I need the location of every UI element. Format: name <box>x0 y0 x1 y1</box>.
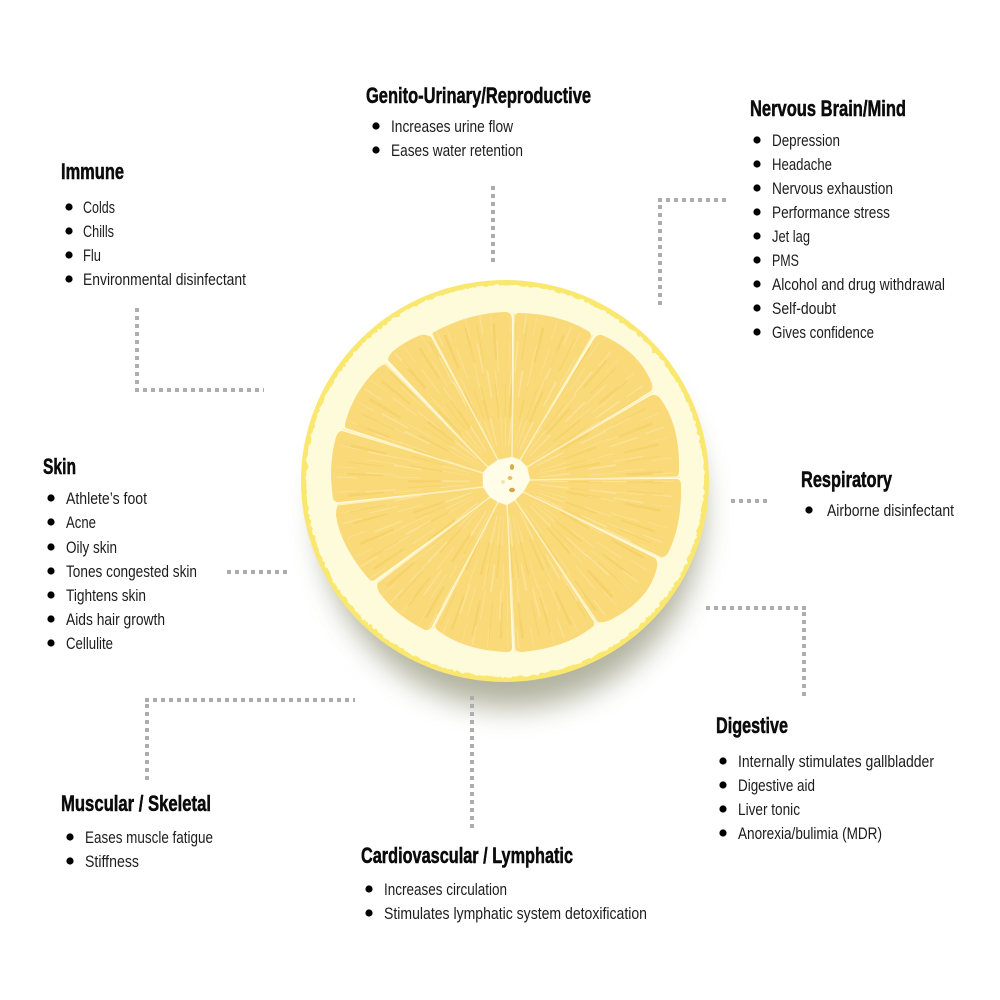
lemon slice <box>301 280 709 708</box>
panel: nervous <box>750 96 945 342</box>
panel: respiratory <box>801 467 954 520</box>
list: respiratory: Airborne disinfectant <box>827 501 954 520</box>
connector: digestive <box>706 608 806 698</box>
list: skin <box>47 489 197 653</box>
list: cardiovascular: Stimulates lymphatic system detoxification <box>384 904 647 923</box>
connector: muscular skeletal <box>145 700 355 781</box>
list: nervous: Self-doubt <box>772 299 836 318</box>
heading: respiratory: Respiratory <box>801 467 893 492</box>
list: skin: Aids hair growth <box>66 610 165 629</box>
list: digestive: Liver tonic <box>738 800 800 819</box>
list: immune: Colds <box>83 198 115 217</box>
list: digestive: Anorexia/bulimia (MDR) <box>738 824 882 843</box>
lemon pith <box>306 285 704 677</box>
list: digestive <box>719 752 934 843</box>
panel: immune <box>61 159 246 289</box>
list: nervous: Headache <box>772 155 832 174</box>
list: nervous: Gives confidence <box>772 323 874 342</box>
panel: cardiovascular <box>361 843 647 923</box>
list: nervous: PMS <box>772 251 799 270</box>
list: digestive: Internally stimulates gallbladder <box>738 752 934 771</box>
connector: genito-urinary <box>491 186 495 262</box>
list: nervous: Depression <box>772 131 840 150</box>
panel: muscular skeletal <box>61 791 213 871</box>
heading: immune: Immune <box>61 159 124 184</box>
list: skin: Athlete’s foot <box>66 489 147 508</box>
list: skin: Tightens skin <box>66 586 146 605</box>
heading: nervous: Nervous Brain/Mind <box>750 96 906 121</box>
panel: genito-urinary <box>366 83 591 160</box>
list: cardiovascular <box>365 880 647 923</box>
list: nervous <box>753 131 945 342</box>
list: nervous: Performance stress <box>772 203 890 222</box>
list: skin: Oily skin <box>66 538 117 557</box>
heading: muscular skeletal: Muscular / Skeletal <box>61 791 211 816</box>
list: genito-urinary: Eases water retention <box>391 141 523 160</box>
list: nervous: Alcohol and drug withdrawal <box>772 275 945 294</box>
list: immune: Environmental disinfectant <box>83 270 246 289</box>
heading: skin: Skin <box>43 454 76 479</box>
segment membranes <box>337 313 680 652</box>
lemon core <box>483 457 530 505</box>
list: skin: Acne <box>66 513 96 532</box>
list: nervous: Jet lag <box>772 227 810 246</box>
panel: digestive <box>716 713 934 843</box>
heading: digestive: Digestive <box>716 713 788 738</box>
list: skin: Cellulite <box>66 634 113 653</box>
heading: cardiovascular: Cardiovascular / Lymphatic <box>361 843 573 868</box>
lemon segments <box>331 312 682 652</box>
list: muscular skeletal: Stiffness <box>85 852 139 871</box>
connector: nervous <box>658 200 730 305</box>
lemon drop shadow <box>319 316 703 708</box>
list: genito-urinary: Increases urine flow <box>391 117 514 136</box>
panel: skin <box>43 454 197 653</box>
list: digestive: Digestive aid <box>738 776 815 795</box>
list: immune <box>65 198 246 289</box>
list: cardiovascular: Increases circulation <box>384 880 507 899</box>
connector: skin <box>227 570 287 574</box>
lemon rind <box>301 280 709 682</box>
list: immune: Chills <box>83 222 114 241</box>
list: skin: Tones congested skin <box>66 562 197 581</box>
list: muscular skeletal <box>66 828 213 871</box>
heading: genito-urinary: Genito-Urinary/Reproductive <box>366 83 591 108</box>
list: genito-urinary <box>372 117 523 160</box>
list: immune: Flu <box>83 246 101 265</box>
connector: cardiovascular <box>470 696 474 828</box>
list: muscular skeletal: Eases muscle fatigue <box>85 828 213 847</box>
connector: respiratory <box>731 499 768 503</box>
connector: immune <box>135 308 264 390</box>
list: nervous: Nervous exhaustion <box>772 179 893 198</box>
